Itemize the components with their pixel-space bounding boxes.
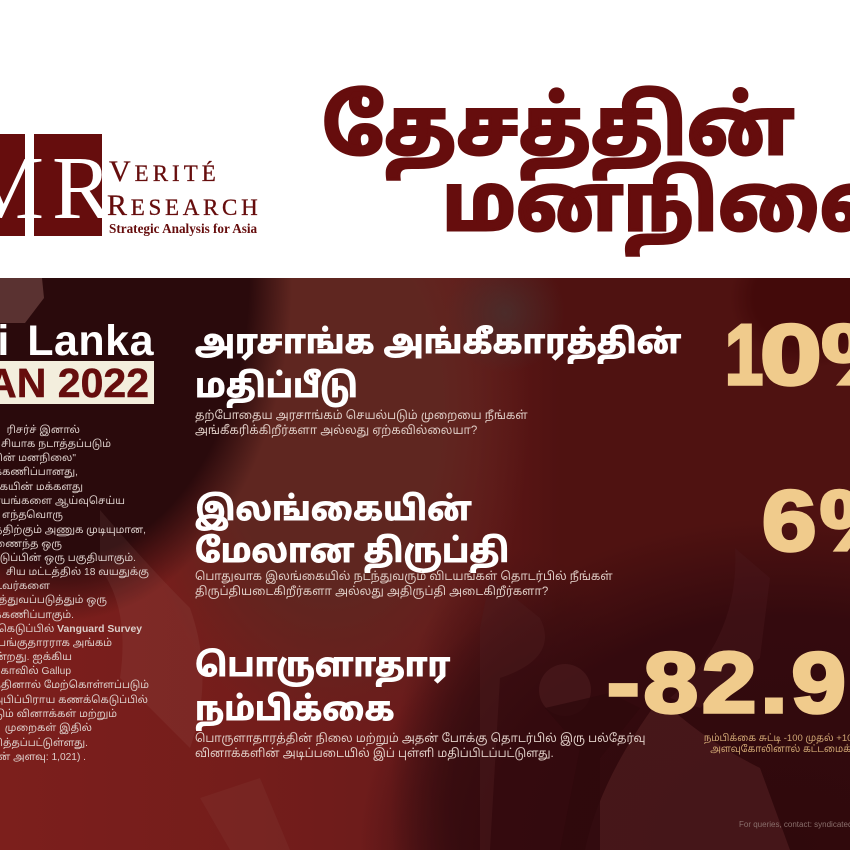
heading: மேலான திருப்தி — [195, 532, 509, 569]
heading: மதிப்பீடு — [195, 367, 358, 404]
logo: R — [52, 139, 112, 238]
heading: இலங்கையின் — [195, 490, 472, 527]
question: தற்போதைய அரசாங்கம் செயல்படும் முறையை நீங்கள் — [195, 410, 528, 422]
logo: Strategic Analysis for Asia — [109, 221, 257, 236]
title: தேசத்தின் — [322, 82, 794, 171]
title — [322, 82, 850, 257]
text block: methodology: சியாக நடாத்தப்படும் — [1, 439, 111, 450]
heading — [195, 490, 509, 573]
panel: economic confidence — [195, 643, 850, 761]
panel: government approval — [195, 320, 850, 438]
text block: methodology: முறைகள் இதில் — [5, 723, 92, 734]
text block: methodology: ரிசர்ச் இனால் — [7, 425, 80, 436]
logo: RESEARCH — [107, 189, 261, 222]
panel: about the survey — [0, 317, 154, 763]
text block: methodology: பங்குதாரராக அங்கம் — [0, 638, 112, 649]
heading: அரசாங்க அங்கீகாரத்தின் — [195, 323, 681, 360]
question: வினாக்களின் அடிப்படையில் இப் புள்ளி மதிப்பிடப்பட்டுளது. — [195, 748, 554, 760]
background silhouettes — [0, 278, 790, 850]
panel: overall satisfaction — [195, 488, 850, 599]
question: அங்கீகரிக்கிறீர்களா அல்லது ஏற்கவில்லையா? — [195, 425, 477, 437]
heading — [195, 646, 450, 731]
logo — [0, 134, 261, 238]
question — [195, 732, 646, 761]
note — [704, 733, 850, 755]
question: திருப்தியடைகிறீர்களா அல்லது அதிருப்தி அடைகிறீர்களா? — [195, 586, 548, 598]
question — [195, 570, 613, 599]
question: பொருளாதாரத்தின் நிலை மற்றும் அதன் போக்கு தொடர்பில் இரு பல்தேர்வு — [195, 733, 646, 745]
question — [195, 409, 528, 438]
heading — [195, 323, 682, 408]
heading: நம்பிக்கை — [195, 690, 394, 727]
text block: methodology: எந்தவொரு — [2, 510, 63, 521]
text block: methodology — [0, 424, 149, 763]
background panel — [0, 278, 850, 850]
text block: methodology: கெடுப்பில் Vanguard Survey — [0, 624, 142, 635]
heading: பொருளாதார — [195, 646, 450, 683]
logo: VERITÉ — [109, 155, 220, 188]
text block: methodology: சிய மட்டத்தில் 18 வயதுக்கு — [6, 567, 149, 578]
question: பொதுவாக இலங்கையில் நடந்துவரும் விடயங்கள் தொடர்பில் நீங்கள் — [195, 571, 613, 583]
